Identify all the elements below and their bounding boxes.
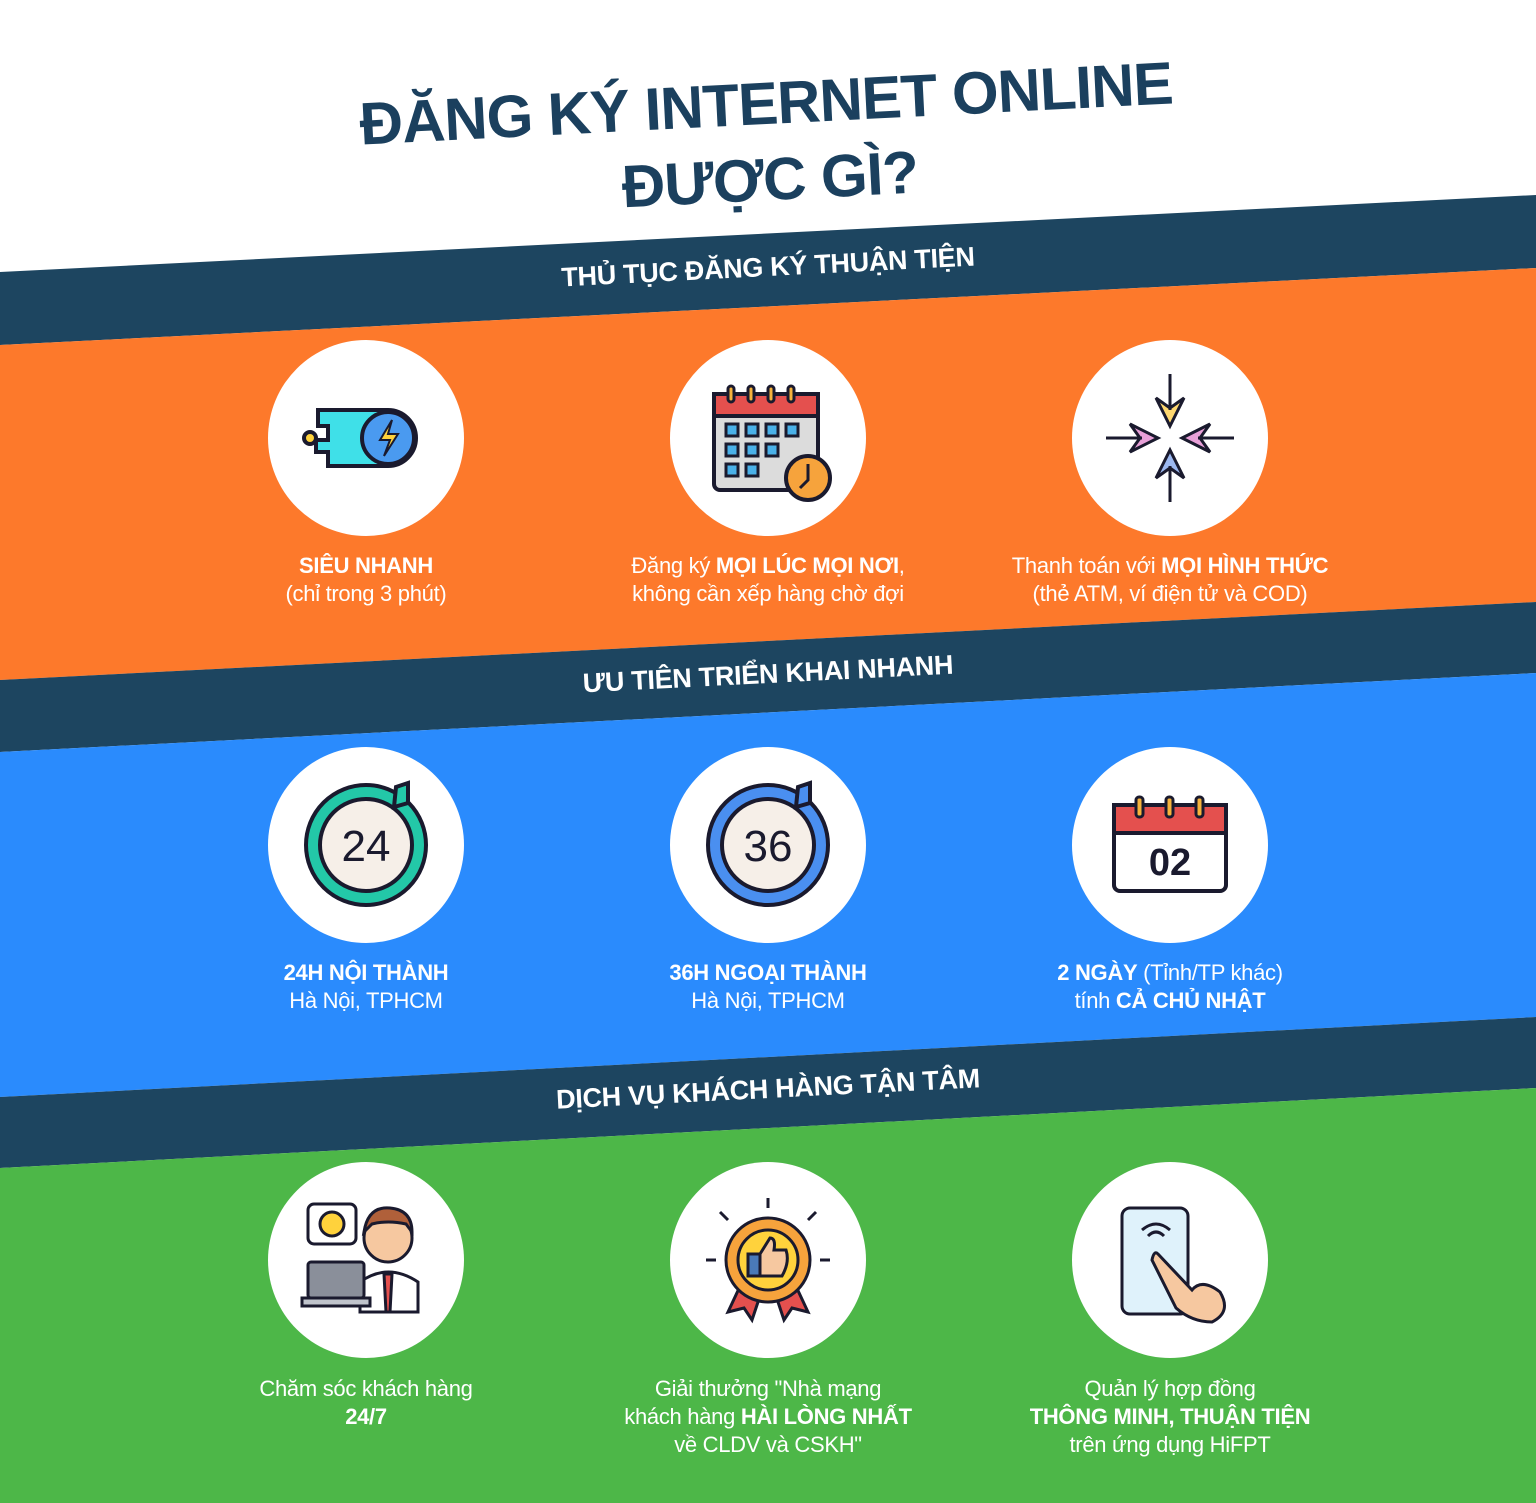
icon circle: 02 calendar: 02 <box>1149 842 1191 884</box>
title: ĐƯỢC GÌ? <box>620 139 920 220</box>
caption: mọi lúc: không cần xếp hàng chờ đợi <box>632 581 904 606</box>
caption: giải thưởng <box>624 1376 912 1457</box>
icon circle: 36h: 36 <box>744 822 792 871</box>
icon circle: support <box>268 1162 464 1358</box>
icon circle: 24h: 24 <box>342 822 390 871</box>
caption: mọi lúc <box>631 553 905 606</box>
caption: chăm sóc <box>259 1376 473 1429</box>
heading: ưu tiên: ƯU TIÊN TRIỂN KHAI NHANH <box>582 650 954 698</box>
caption: mọi lúc: Đăng ký MỌI LÚC MỌI NƠI, <box>631 553 905 578</box>
icon circle: phone touch <box>1072 1162 1268 1358</box>
caption: giải thưởng: khách hàng HÀI LÒNG NHẤT <box>624 1404 912 1429</box>
caption: giải thưởng: Giải thưởng "Nhà mạng <box>655 1376 881 1401</box>
caption: 36h <box>669 960 867 1013</box>
caption: 24h: Hà Nội, TPHCM <box>289 988 443 1013</box>
icon circle: fast <box>268 340 464 536</box>
icon circle: arrows <box>1072 340 1268 536</box>
caption: thanh toán: Thanh toán với MỌI HÌNH THỨC <box>1012 553 1328 578</box>
caption: 36h: Hà Nội, TPHCM <box>691 988 845 1013</box>
heading: thủ tục: THỦ TỤC ĐĂNG KÝ THUẬN TIỆN <box>561 242 975 292</box>
icon circle: calendar <box>670 340 866 536</box>
caption: quản lý: Quản lý hợp đồng <box>1084 1376 1256 1401</box>
icon circle: award <box>670 1162 866 1358</box>
caption: 24h: 24H NỘI THÀNH <box>284 960 448 985</box>
icon circle: 36h <box>670 747 866 943</box>
caption: quản lý: THÔNG MINH, THUẬN TIỆN <box>1030 1404 1310 1429</box>
caption: quản lý: trên ứng dụng HiFPT <box>1069 1432 1270 1457</box>
caption: thanh toán: (thẻ ATM, ví điện tử và COD) <box>1033 581 1307 606</box>
caption: 36h: 36H NGOẠI THÀNH <box>669 960 867 985</box>
caption: thanh toán <box>1012 553 1328 606</box>
caption: siêu nhanh: SIÊU NHANH <box>299 553 433 578</box>
caption: 2 ngày: 2 NGÀY (Tỉnh/TP khác) <box>1057 960 1283 985</box>
caption: chăm sóc: 24/7 <box>345 1404 387 1429</box>
caption: giải thưởng: về CLDV và CSKH" <box>674 1432 862 1457</box>
caption: 2 ngày <box>1057 960 1283 1013</box>
caption: 2 ngày: tính CẢ CHỦ NHẬT <box>1075 988 1265 1013</box>
icon circle: 02 calendar <box>1072 747 1268 943</box>
caption: quản lý <box>1030 1376 1310 1457</box>
caption: 24h <box>284 960 448 1013</box>
icon circle: 24h <box>268 747 464 943</box>
title: ĐĂNG KÝ INTERNET ONLINE <box>358 50 1174 158</box>
caption: siêu nhanh <box>286 553 446 606</box>
caption: chăm sóc: Chăm sóc khách hàng <box>259 1376 473 1401</box>
heading: dịch vụ: DỊCH VỤ KHÁCH HÀNG TẬN TÂM <box>555 1063 981 1115</box>
title <box>358 50 1174 220</box>
caption: siêu nhanh: (chỉ trong 3 phút) <box>286 581 446 606</box>
